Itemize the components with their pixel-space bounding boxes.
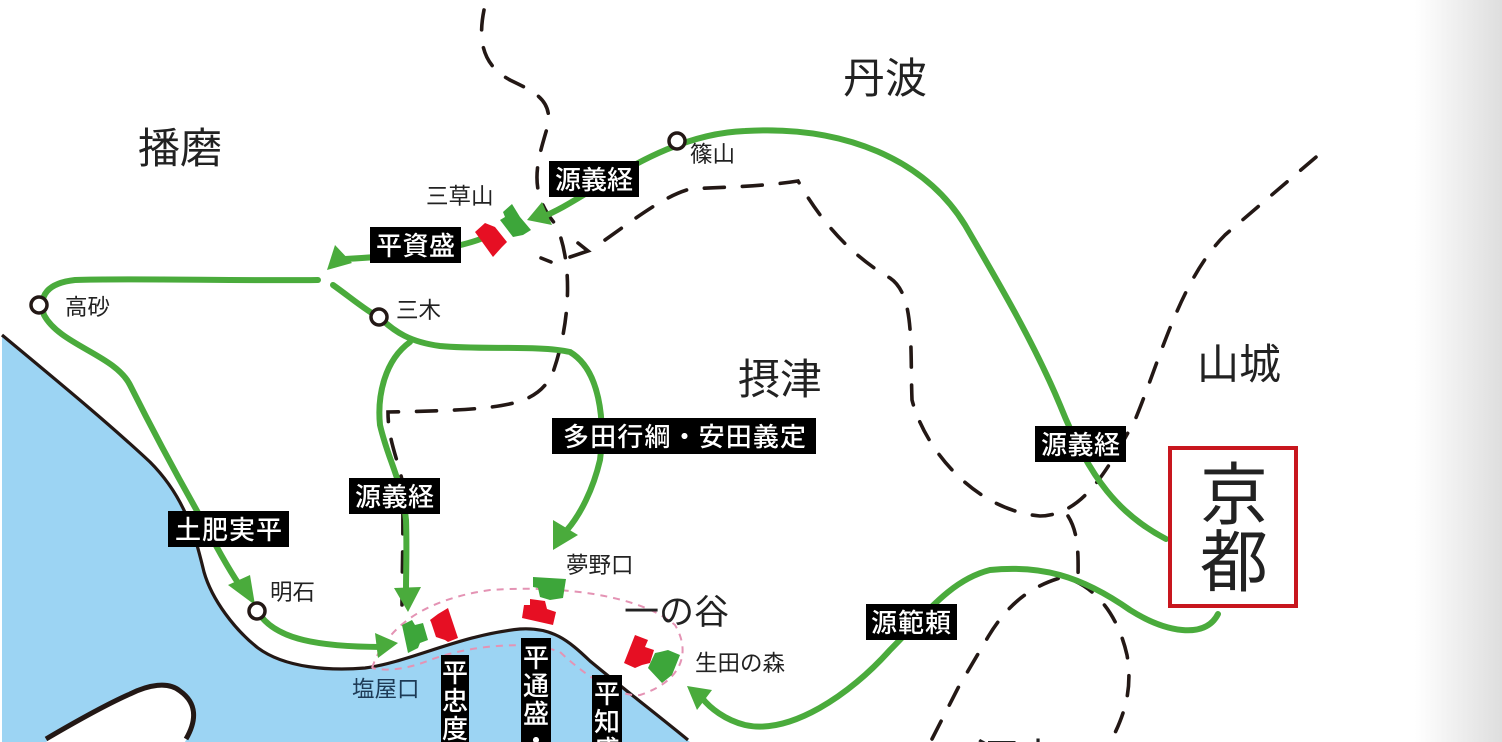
place labels: 生田の森	[695, 651, 786, 676]
province labels: 摂津	[738, 356, 822, 403]
province labels: 播磨	[138, 125, 222, 172]
label: Taira no Michimori: 平	[523, 643, 549, 673]
route: Taira Sukemori section	[345, 235, 490, 259]
label: Minamoto no Yoshitsune north: 源義経	[555, 165, 633, 195]
label: Taira no Tomomori: 知	[594, 707, 620, 737]
icon: green Genji, Shioya	[402, 620, 428, 653]
label: Taira no Michimori: 通	[523, 671, 549, 701]
Kyoto box: 京	[1200, 458, 1268, 534]
icon: red Heike, Yumeno	[522, 599, 556, 625]
place labels: 一の谷	[624, 593, 729, 632]
place labels: 三木	[396, 298, 441, 323]
place labels: 塩屋口	[352, 677, 420, 702]
route: west to Takasago	[42, 279, 318, 590]
route: Yoshitsune south	[379, 342, 410, 590]
province labels: 山城	[1197, 341, 1281, 388]
Kyoto box	[1170, 448, 1296, 606]
army icons	[402, 204, 680, 683]
route: Akashi to Shioya	[258, 612, 385, 647]
place labels	[65, 142, 786, 702]
label: Yoshitsune near Kyoto: 源義経	[1041, 430, 1120, 460]
label: Taira no Michimori	[521, 638, 551, 742]
icon: green Genji, Mikusayama	[500, 204, 531, 237]
label: Taira no Michimori: 盛	[523, 699, 549, 729]
icon: red Heike, Shioya	[430, 608, 458, 642]
route: Yoshitsune main to Kyoto	[540, 130, 1166, 539]
label: Taira no Tomomori	[592, 675, 622, 742]
icon: red Heike, Ikuta	[624, 635, 654, 668]
pink Ichinotani defense line	[372, 589, 683, 695]
route: Noriyori	[702, 569, 1218, 727]
province labels: 丹波	[843, 55, 927, 102]
routes	[42, 130, 1218, 727]
arrowheads	[228, 202, 712, 710]
label: Taira no Tadanori: 平	[442, 658, 468, 688]
commander labels	[168, 161, 1126, 742]
icon: red Heike, Mikusayama	[475, 223, 507, 257]
label: Taira no Tadanori: 忠	[442, 686, 468, 716]
place labels: 三草山	[426, 184, 494, 209]
place labels: 明石	[270, 580, 315, 605]
label: Yoshitsune south: 源義経	[355, 482, 434, 512]
icon: green Genji, Yumeno	[533, 577, 566, 600]
label: Doi Sanehira: 土肥実平	[175, 515, 282, 545]
place labels: 夢野口	[566, 553, 634, 578]
province labels	[138, 55, 1281, 742]
label: Taira no Tadanori	[441, 655, 469, 742]
Kyoto box: 都	[1200, 525, 1268, 601]
sea and coastline	[2, 335, 690, 742]
label: Minamoto no Noriyori: 源範頼	[871, 608, 951, 638]
place labels: 高砂	[65, 295, 110, 320]
route: Miki and Tada	[333, 285, 602, 530]
label: Tada and Yasuda: 多田行綱・安田義定	[563, 422, 806, 452]
island: Awaji	[46, 685, 194, 742]
place labels: 篠山	[690, 142, 735, 167]
location markers	[31, 133, 685, 619]
label: Taira no Sukemori: 平資盛	[376, 231, 455, 261]
label: Taira no Tomomori: 平	[594, 679, 620, 709]
province boundaries (dashed)	[388, 10, 1322, 739]
icon: green Genji, Ikuta	[648, 650, 680, 683]
page edge shadow	[1415, 0, 1502, 742]
